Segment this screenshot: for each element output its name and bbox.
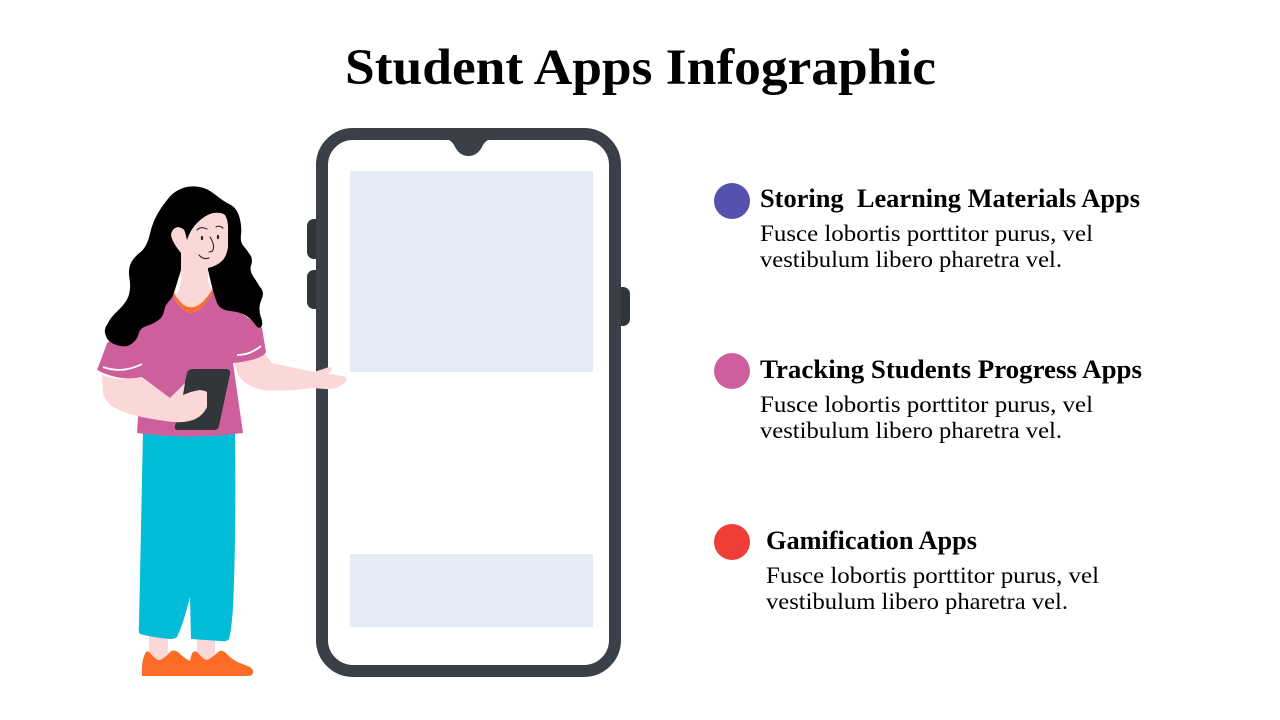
legs (149, 630, 215, 665)
description: vestibulum libero pharetra vel. (766, 589, 1068, 614)
bullet: pink (714, 353, 750, 389)
tablet (175, 369, 230, 430)
list item: tracking progress (714, 353, 1142, 443)
top screen panel (350, 171, 593, 372)
list item: gamification (714, 524, 1099, 614)
collar (173, 289, 213, 312)
facial features (197, 226, 223, 259)
heading: Tracking Students Progress Apps (760, 355, 1142, 384)
phone body (322, 134, 615, 671)
list item: storing learning materials (714, 183, 1140, 272)
bottom screen panel (350, 554, 593, 627)
trousers (139, 430, 235, 641)
description: Fusce lobortis porttitor purus, vel (766, 563, 1099, 588)
description: Fusce lobortis porttitor purus, vel (760, 392, 1093, 417)
student figure (97, 186, 347, 676)
far arm (234, 354, 347, 391)
bullet: red (714, 524, 750, 560)
heading: Gamification Apps (766, 526, 977, 555)
phone side buttons (307, 219, 630, 326)
phone notch (446, 139, 491, 156)
face and ear (171, 213, 228, 270)
phone illustration (307, 134, 630, 671)
description: Fusce lobortis porttitor purus, vel (760, 221, 1093, 246)
neck (175, 250, 212, 307)
sleeve stripes (103, 346, 261, 370)
long hair (105, 186, 263, 346)
title: Student Apps Infographic (345, 40, 936, 96)
description: vestibulum libero pharetra vel. (760, 418, 1062, 443)
t-shirt (97, 291, 266, 436)
shoes (142, 650, 253, 676)
bullet: purple (714, 183, 750, 219)
heading: Storing Learning Materials Apps (760, 184, 1140, 213)
description: vestibulum libero pharetra vel. (760, 247, 1062, 272)
near arm and hand (102, 375, 207, 422)
